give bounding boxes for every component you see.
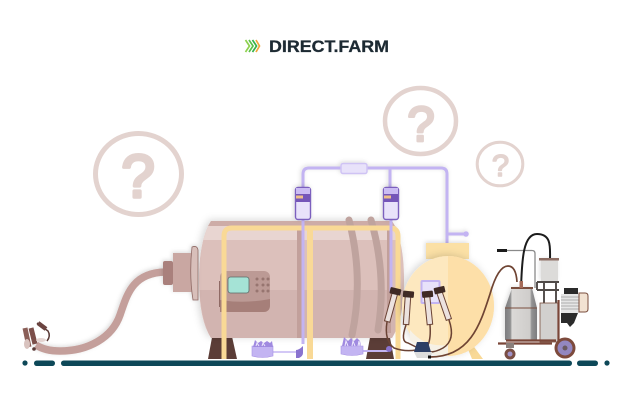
logo	[246, 37, 389, 56]
purple pipework	[303, 164, 469, 243]
vacuum hose and claw, left	[24, 272, 165, 351]
handle	[505, 250, 535, 288]
claw collector	[414, 342, 431, 352]
jar: right	[384, 188, 398, 220]
milk tank	[163, 188, 404, 359]
yellow frame	[224, 228, 398, 359]
side column	[540, 303, 558, 342]
large wheel	[554, 338, 576, 358]
milk can	[505, 288, 537, 340]
question mark circle: large	[96, 134, 182, 214]
icon: logo chevrons	[246, 40, 260, 52]
vessel body	[402, 256, 494, 356]
teat cup liners	[389, 286, 446, 298]
motor	[561, 288, 588, 327]
ground line	[22, 360, 610, 366]
tank end cap	[163, 246, 198, 300]
milk cluster: left	[252, 340, 273, 358]
yellow milk vessel	[402, 243, 494, 359]
question mark circle: medium	[385, 88, 456, 154]
left teat cups	[24, 323, 49, 351]
upper receiver	[541, 260, 558, 281]
logo wordmark: DIRECT.FARM	[269, 37, 389, 56]
tank legs	[208, 330, 394, 359]
question mark circle: large: ?	[121, 143, 155, 210]
main milk hose	[430, 266, 517, 357]
question mark circle: small	[477, 142, 523, 186]
teat cups	[387, 291, 449, 325]
portable milking machine	[497, 234, 588, 360]
claw hoses	[386, 320, 451, 352]
milking claw	[386, 266, 517, 358]
small wheel	[504, 343, 516, 360]
tank body	[199, 221, 404, 338]
tank straps	[349, 220, 381, 335]
vessel leg	[465, 340, 483, 359]
vessel neck	[426, 243, 469, 259]
cart frame	[498, 300, 558, 344]
control panel	[219, 271, 270, 312]
milk cluster: right	[341, 337, 363, 356]
question mark circle: medium: ?	[407, 98, 435, 152]
question mark circle: small: ?	[492, 148, 509, 183]
black vacuum hose	[521, 234, 550, 288]
sight window	[422, 281, 440, 303]
jar: left	[296, 188, 310, 220]
purple drains	[272, 220, 391, 352]
